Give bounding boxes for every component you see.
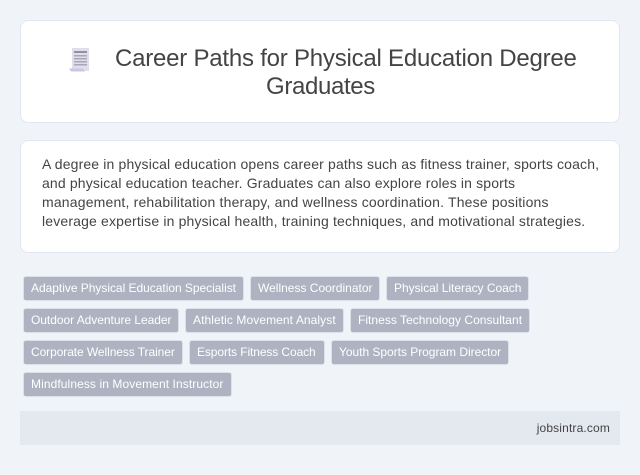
tag: Esports Fitness Coach bbox=[197, 345, 316, 359]
tag: Mindfulness in Movement Instructor bbox=[31, 377, 223, 391]
description text: leverage expertise in physical health, training techniques, and motivational strategies. bbox=[42, 213, 585, 229]
description text: A degree in physical education opens career paths such as fitness trainer, sports coach, bbox=[42, 156, 599, 172]
tag: Fitness Technology Consultant bbox=[358, 313, 522, 327]
description text: management, rehabilitation therapy, and wellness coordination. These positions bbox=[42, 194, 549, 210]
panel: header bbox=[20, 20, 620, 123]
tag bbox=[350, 308, 530, 333]
description text: and physical education teacher. Graduates can also explore roles in sports bbox=[42, 175, 515, 191]
title: Career Paths for Physical Education Degree bbox=[115, 45, 577, 72]
tag: Physical Literacy Coach bbox=[394, 281, 521, 295]
footer source text: jobsintra.com bbox=[537, 421, 610, 435]
tag bbox=[250, 276, 380, 301]
tag list bbox=[23, 276, 530, 397]
icon: document scroll bbox=[69, 48, 89, 72]
tag bbox=[185, 308, 344, 333]
tag bbox=[386, 276, 529, 301]
title: Graduates bbox=[266, 73, 375, 100]
tag bbox=[23, 340, 183, 365]
tag: Adaptive Physical Education Specialist bbox=[31, 281, 236, 295]
tag bbox=[189, 340, 325, 365]
tag: Outdoor Adventure Leader bbox=[31, 313, 171, 327]
tag: Wellness Coordinator bbox=[258, 281, 372, 295]
tag: Athletic Movement Analyst bbox=[193, 313, 336, 327]
tag bbox=[23, 308, 179, 333]
tag bbox=[23, 276, 244, 301]
tag bbox=[331, 340, 509, 365]
footer bar bbox=[20, 411, 620, 445]
title bbox=[115, 45, 577, 100]
panel: description bbox=[20, 140, 620, 253]
description text bbox=[42, 156, 599, 229]
tag bbox=[23, 372, 232, 397]
tag: Corporate Wellness Trainer bbox=[31, 345, 175, 359]
tag: Youth Sports Program Director bbox=[339, 345, 501, 359]
